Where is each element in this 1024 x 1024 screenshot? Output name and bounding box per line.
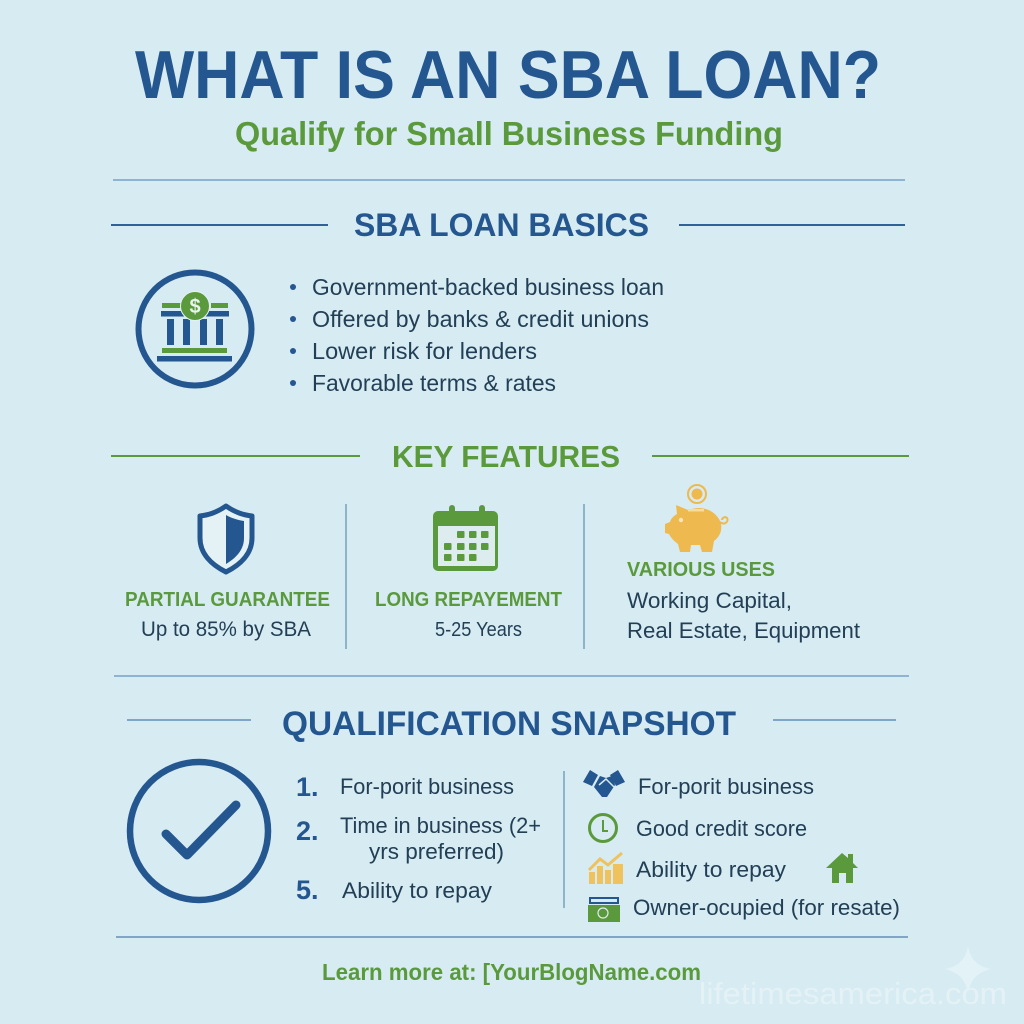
feature: long repayment: [375, 588, 562, 641]
icon: check mark circle: [130, 762, 268, 900]
numbered list: 2.: [296, 816, 319, 846]
icon: bank with dollar coin: $: [189, 296, 201, 318]
feature: various uses: VARIOUS USES: [627, 558, 775, 581]
icon: bank with dollar coin: [138, 272, 252, 386]
feature: partial guarantee: [125, 588, 330, 641]
list: basics bullets: Favorable terms & rates: [312, 370, 556, 396]
feature: various uses: Real Estate, Equipment: [627, 618, 861, 643]
icon: clock: [590, 814, 616, 842]
icon: cash: [588, 897, 620, 922]
icon: piggy bank: [665, 485, 728, 552]
heading: qualification snapshot: QUALIFICATION SNAPSHOT: [282, 705, 736, 743]
numbered list: 5.: [296, 875, 319, 905]
text: for-porit business: For-porit business: [638, 774, 814, 799]
numbered list: [296, 772, 541, 905]
feature: partial guarantee: PARTIAL GUARANTEE: [125, 588, 330, 611]
heading: SBA loan basics: SBA LOAN BASICS: [354, 207, 649, 243]
numbered list: Time in business (2+: [340, 813, 541, 838]
numbered list: Ability to repay: [342, 878, 492, 903]
text: owner-occupied: Owner-ocupied (for resate): [633, 895, 900, 920]
heading: key features: KEY FEATURES: [392, 439, 620, 474]
feature: long repayment: LONG REPAYEMENT: [375, 588, 562, 611]
icon: house: [826, 853, 858, 883]
feature: partial guarantee: Up to 85% by SBA: [141, 617, 312, 641]
feature: various uses: [627, 558, 861, 643]
list: basics bullets: Government-backed business loan: [312, 274, 664, 300]
numbered list: For-porit business: [340, 774, 514, 799]
list: basics bullets: Offered by banks & credit unions: [312, 306, 649, 332]
subtitle: Qualify for Small Business Funding: [235, 115, 783, 152]
numbered list: yrs preferred): [369, 839, 504, 864]
footer link: Learn more at: [YourBlogName.com: [322, 959, 701, 985]
feature: long repayment: 5-25 Years: [435, 619, 522, 641]
icon: shield: [200, 506, 252, 572]
watermark text: lifetimesamerica.com: [699, 976, 1007, 1011]
list: basics bullets: Lower risk for lenders: [312, 338, 537, 364]
icon: growth chart: [589, 853, 623, 884]
text: good credit score: Good credit score: [636, 816, 807, 841]
icon: handshake: [583, 770, 625, 797]
watermark sparkle: [945, 946, 991, 993]
feature: various uses: Working Capital,: [627, 588, 792, 613]
text: ability to repay: Ability to repay: [636, 857, 786, 882]
icon: calendar: [433, 505, 498, 571]
title: WHAT IS AN SBA LOAN?: [135, 37, 881, 113]
list: basics bullets: [290, 274, 664, 396]
numbered list: 1.: [296, 772, 319, 802]
